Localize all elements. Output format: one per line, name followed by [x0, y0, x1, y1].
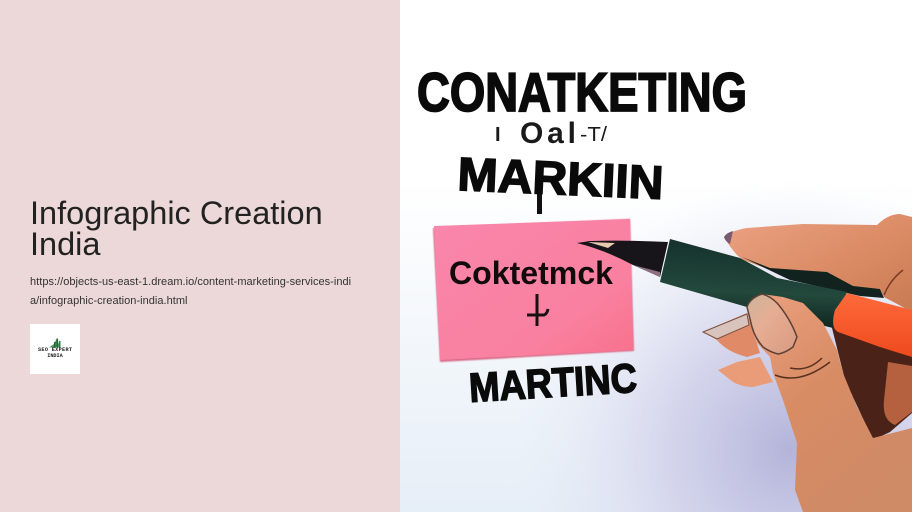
lower fingers [703, 313, 773, 387]
pink sticky note [433, 219, 634, 362]
pen grip [660, 239, 847, 328]
sub text: I Oal-T/: I [495, 124, 501, 146]
title: Infographic Creation [30, 194, 323, 230]
upper finger [724, 214, 912, 312]
plus mark [527, 294, 548, 326]
middle finger behind [884, 362, 912, 425]
connector tick [537, 194, 542, 214]
source url text [30, 276, 351, 307]
note text: Coktetmck: Coktetmck [449, 255, 613, 291]
sub text: I Oal-T/: Oal [520, 117, 576, 150]
fingernail: upper finger [724, 231, 733, 244]
thumbnail [747, 294, 797, 354]
panel: left title panel [0, 0, 400, 512]
headline: MARTINC: MARTINC [468, 355, 638, 411]
headline: CONATKETING: CONATKETING [417, 61, 747, 123]
title: India [30, 226, 100, 262]
pen tip [577, 241, 668, 277]
headline: MARKIIN: MARKIIN [457, 147, 665, 209]
sub text: I Oal-T/ [495, 117, 607, 150]
source url text: https://objects-us-east-1.dream.io/content-marketing-services-indi [30, 276, 351, 288]
logo: SEO Expert India: SEO EXPERT [38, 347, 72, 353]
finger shadow along pen [742, 257, 884, 298]
pen barrel orange [833, 293, 912, 357]
logo: SEO Expert India [30, 324, 80, 374]
panel: photo of hand writing on a note [400, 61, 912, 512]
hand holding pen [577, 214, 912, 512]
finger crease [884, 270, 903, 295]
sub text: I Oal-T/: -T/ [580, 124, 607, 146]
source url text: a/infographic-creation-india.html [30, 295, 188, 307]
knuckle creases [775, 358, 830, 378]
logo: SEO Expert India: INDIA [47, 353, 64, 359]
background paper [400, 0, 912, 512]
thumb and wrist [747, 294, 912, 512]
title [30, 194, 323, 262]
dark palm behind pen [825, 300, 912, 440]
